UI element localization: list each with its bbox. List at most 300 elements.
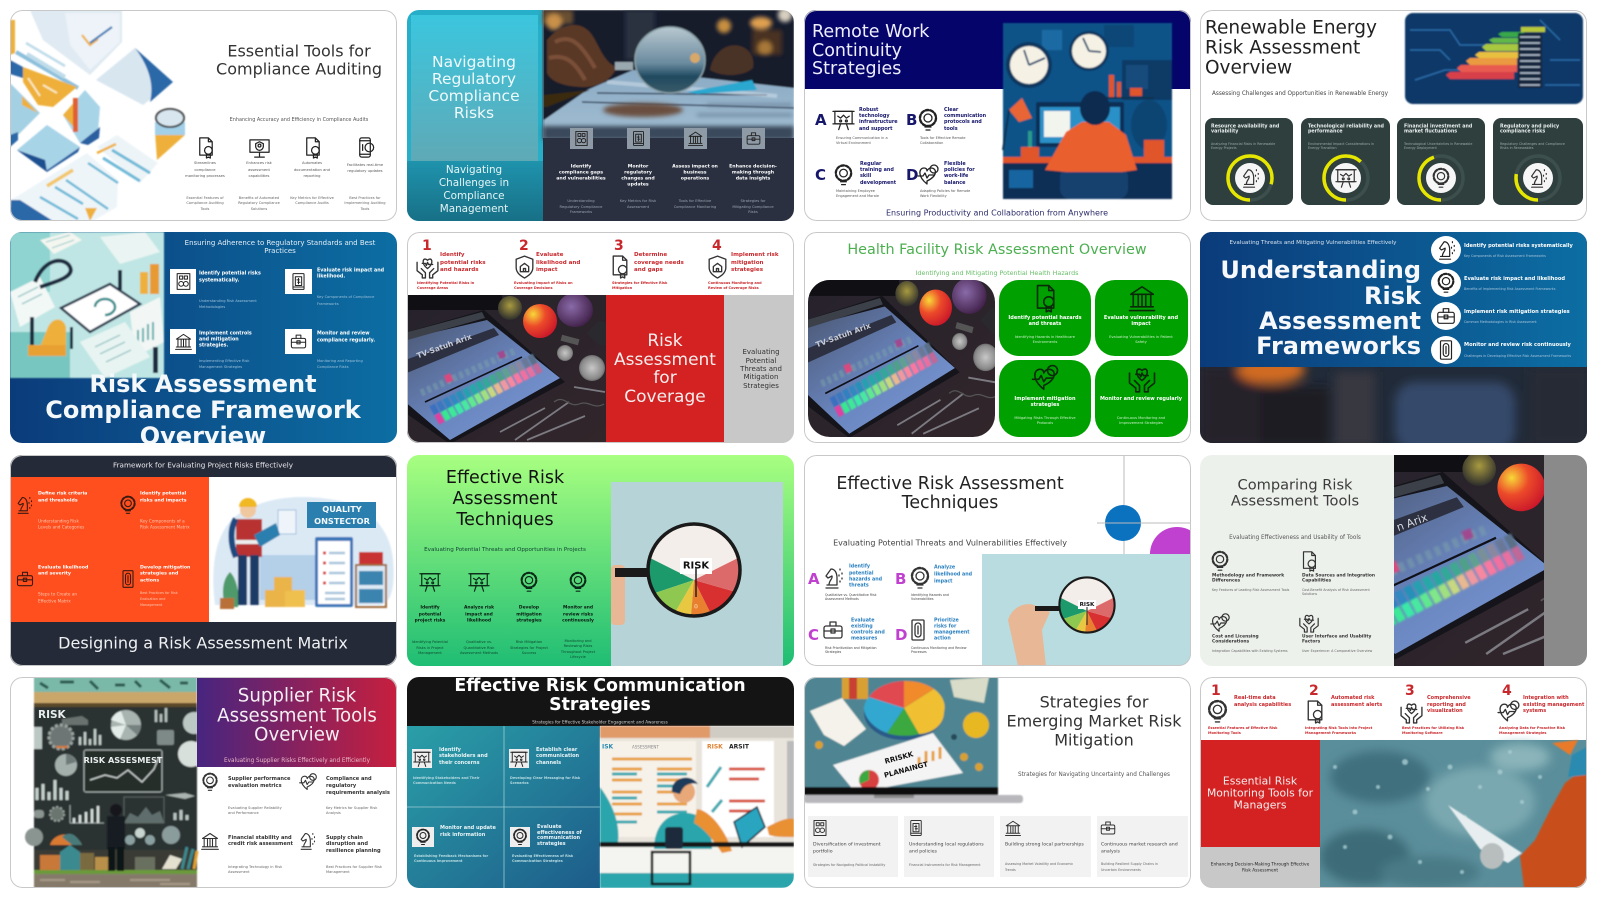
supporting captions: Reviewing Risks — [564, 644, 593, 648]
supporting captions: Frameworks — [570, 210, 592, 214]
title: Mitigation — [1054, 730, 1134, 750]
card: resource availability — [1205, 118, 1293, 205]
feature captions: capabilities — [249, 174, 270, 178]
item A: A — [815, 111, 827, 129]
supporting captions: Tools — [360, 207, 370, 211]
item: cost: Cost and Licensing — [1212, 634, 1259, 640]
subtitle block: Potential — [746, 357, 776, 365]
item: monitor compliance: Monitoring and Reporting — [317, 359, 363, 363]
title — [454, 676, 746, 715]
item B: B — [906, 111, 917, 129]
step labels: strategies — [516, 618, 542, 624]
tile: implement mitigation: Implement mitigation — [1014, 396, 1076, 402]
step 2: Evaluating Impact of Risks on — [514, 281, 573, 285]
panel: Designing a Risk Assessment Matrix — [10, 455, 397, 666]
title: Remote Work — [812, 22, 930, 42]
step: monitor: Challenges in Developing Effective Risk Assessment Frameworks — [1464, 354, 1571, 358]
item D: Work Flexibility — [920, 194, 947, 198]
item: methodology: Methodology and Framework — [1212, 572, 1284, 578]
step 2: 2 — [519, 238, 529, 254]
card: resource availability: variability — [1211, 128, 1239, 134]
title — [46, 374, 362, 443]
item B — [895, 564, 973, 601]
item: data sources: Solutions — [1302, 592, 1317, 596]
item A: Assessment Methods — [825, 597, 859, 601]
item: identify risks: Risk Assessment Matrix — [140, 524, 190, 530]
step: evaluate: Evaluate risk impact and likelihood — [1464, 276, 1565, 282]
title — [812, 22, 930, 79]
item A — [808, 564, 883, 601]
card: technological reliability — [1301, 118, 1390, 205]
item C: C — [808, 626, 819, 644]
item C: development — [860, 180, 897, 186]
title: Understanding — [1220, 256, 1421, 284]
action labels — [556, 164, 777, 188]
card: local partnerships — [1000, 816, 1091, 877]
step 3: and gaps — [634, 267, 663, 273]
item D: management — [934, 630, 970, 636]
step 2: Evaluate — [536, 252, 564, 258]
item C: existing — [851, 624, 873, 630]
feature captions: monitoring processes — [185, 174, 225, 178]
item: compliance: regulatory — [326, 783, 357, 789]
item B: Vulnerabilities — [911, 597, 934, 601]
item B: protocols and — [944, 119, 982, 125]
item: channels: communication — [536, 753, 580, 759]
card: resource availability: Resource availability and — [1211, 124, 1280, 130]
item A: technology — [859, 113, 890, 119]
step labels: impact and — [465, 612, 493, 618]
item: data sources: Data Sources and Integration — [1302, 572, 1375, 578]
step: implement: Common Methodologies in Risk Assessment — [1464, 320, 1537, 324]
item: compliance: Analysis — [326, 811, 341, 815]
item B: communication — [944, 113, 987, 119]
item D — [895, 618, 970, 654]
tile: identify hazards: Identifying Hazards in Healthcare — [1015, 335, 1076, 339]
supporting captions: Strategies for — [740, 199, 766, 203]
illustration: quality inspector: ONSTECTOR — [314, 516, 371, 526]
item: supply chain: resilience planning — [326, 848, 381, 854]
item A: Robust — [859, 107, 879, 113]
title: Health Facility Risk Assessment Overview — [847, 242, 1147, 258]
subtitle: Challenges in — [439, 177, 509, 189]
feature captions: Facilitates real-time — [347, 163, 384, 167]
card: market research: Continuous market research and — [1101, 842, 1178, 848]
subtitle — [439, 164, 509, 215]
item: implement controls: strategies. — [199, 342, 228, 348]
title — [216, 44, 381, 78]
decorative shapes — [1097, 455, 1204, 581]
step: identify: Identify potential risks systematically — [1464, 243, 1574, 249]
title block: for — [653, 368, 677, 388]
step labels: continuously — [562, 618, 594, 624]
item: define criteria: Understanding Risk — [38, 518, 79, 524]
title: Renewable Energy — [1205, 18, 1377, 38]
header subtitle: Framework for Evaluating Project Risks Effectively — [113, 460, 294, 470]
title: Techniques — [455, 510, 554, 530]
item C: skill — [860, 173, 872, 179]
image: energy rating bars — [1405, 13, 1583, 104]
card: regulatory and policy: Regulatory Challenges and Compliance — [1500, 142, 1565, 146]
feature captions: reporting — [304, 174, 320, 178]
supporting captions: Regulatory Compliance — [560, 205, 603, 209]
item A: Qualitative vs. Quantitative Risk — [825, 593, 877, 597]
photo: analytics tablet close-up: n Arix — [1395, 511, 1430, 534]
item: evaluate: strategies — [537, 841, 566, 847]
step 2: 2 — [1309, 683, 1319, 699]
panel: Renewable Energy Risk Assessment Overview — [1200, 10, 1587, 221]
illustration: abstract documents collage — [10, 10, 185, 221]
item A: Identify — [849, 564, 871, 570]
item C: Evaluate — [851, 618, 875, 624]
item D — [906, 161, 975, 198]
action labels: Monitor — [628, 164, 649, 170]
step 3: 3 — [614, 238, 624, 254]
item C: Regular — [860, 161, 882, 167]
step 3: Determine — [634, 252, 667, 258]
item: channels: Developing Clear Messaging for Risk — [510, 776, 581, 780]
item: implement controls — [170, 329, 252, 369]
card: local regulations: Financial Instruments for Risk Management — [909, 863, 981, 867]
step 1: potential risks — [440, 260, 486, 266]
title — [1206, 19, 1376, 74]
icon row — [570, 128, 765, 149]
photo: worker reading paper in rain — [1320, 740, 1587, 888]
tile: implement mitigation: Protocols — [1037, 421, 1053, 425]
supporting captions: Mitigating Compliance — [732, 205, 774, 209]
title band: Evaluating Supplier Risks Effectively and Efficiently — [224, 758, 371, 764]
item C: C — [815, 166, 826, 184]
item: compliance — [300, 774, 390, 815]
step 1 — [417, 238, 486, 290]
item C: measures — [851, 636, 877, 642]
item C: training and — [860, 167, 894, 173]
tile: evaluate vulnerability: Evaluate vulnerability and — [1104, 315, 1178, 321]
photo: analytics tablet on desk — [798, 269, 1019, 460]
panel: Effective Risk Assessment Techniques (white) — [804, 455, 1204, 666]
step 3 — [1401, 683, 1471, 735]
step 2: assessment alerts — [1331, 702, 1382, 708]
supporting captions: Risk Mitigation — [516, 640, 542, 644]
title: Assessment Tools — [1231, 492, 1359, 510]
step 4: 4 — [1502, 683, 1512, 699]
panel: Comparing Risk Assessment Tools — [1200, 437, 1600, 689]
step 2: Integrating Risk Tools into Project — [1305, 726, 1373, 730]
step 3: coverage needs — [634, 260, 684, 266]
action labels: and vulnerabilities — [556, 176, 606, 182]
step labels: Identify — [420, 604, 440, 610]
item: develop mitigation: Evaluation and — [140, 597, 165, 601]
item: evaluate likelihood: Steps to Create an — [38, 592, 77, 596]
title: Strategies — [812, 59, 901, 79]
panel: Effective Risk Communication Strategies — [407, 676, 794, 888]
step 2: Management Frameworks — [1305, 731, 1356, 735]
item: evaluate: Evaluate — [537, 824, 562, 830]
tile: identify hazards: Identify potential hazards — [1008, 315, 1082, 321]
item: performance — [203, 774, 291, 815]
item: compliance: Compliance and — [326, 776, 372, 782]
tile: identify hazards: and threats — [1029, 321, 1061, 327]
item: evaluate: communication — [537, 835, 581, 841]
photo: blurred desk background — [1200, 232, 1590, 452]
card: financial investment: Technological Uncertainties in Renewable — [1403, 142, 1472, 146]
step labels: review risks — [563, 612, 593, 618]
step 2: likelihood and — [536, 260, 580, 266]
card: financial investment: Energy Deployment — [1404, 146, 1437, 150]
item: implement controls: Implementing Effective Risk — [199, 359, 250, 363]
subtitle block: Risk Assessment — [1242, 868, 1278, 874]
title: Compliance — [428, 87, 520, 105]
item: identify risks: Key Components of a — [140, 518, 185, 524]
action labels: making through — [732, 170, 774, 176]
item A: potential — [849, 570, 874, 576]
subtitle: Evaluating Potential Threats and Opportunities in Projects — [424, 547, 586, 553]
subtitle block: Mitigation — [744, 373, 778, 381]
supporting captions: Success — [522, 651, 536, 655]
panel: Essential Risk Monitoring Tools for Managers — [1200, 677, 1587, 888]
item: stakeholders: Identify — [439, 747, 462, 753]
image: laptop with risk planning desk — [804, 677, 1023, 803]
step labels: project risks — [415, 618, 446, 624]
subtitle: Management — [440, 203, 508, 215]
item A: infrastructure — [859, 119, 898, 125]
supporting captions: Understanding — [567, 199, 595, 203]
card: diversification: Strategies for Navigating Political Instability — [813, 863, 885, 867]
card: market research: Building Resilient Supply Chains in — [1101, 862, 1158, 866]
item B: Analyze — [934, 564, 956, 570]
title: Strategies for — [1040, 692, 1149, 712]
illustration: team reviewing risk charts: ISK — [602, 744, 614, 750]
subtitle block — [724, 295, 794, 443]
item: channels — [509, 747, 581, 785]
step 4: 4 — [712, 238, 722, 254]
step 3: Comprehensive — [1427, 695, 1471, 701]
card: market research: Uncertain Environments — [1101, 868, 1141, 872]
step: identify — [1431, 236, 1574, 264]
supporting captions: Tools — [200, 207, 210, 211]
item C — [808, 618, 885, 654]
tile: evaluate vulnerability — [1095, 280, 1188, 356]
item: monitor compliance — [285, 329, 375, 369]
item B: Collaboration — [920, 141, 943, 145]
step 4: Integration with — [1523, 695, 1569, 701]
item: stakeholders — [412, 747, 488, 785]
item: define criteria: Levels and Categories — [38, 524, 84, 530]
step 1: Monitoring Tools — [1208, 731, 1241, 735]
card: financial investment: market fluctuations — [1404, 128, 1457, 134]
item: channels: channels — [536, 760, 561, 766]
supporting captions — [412, 639, 596, 659]
supporting captions: Monitoring and — [564, 639, 592, 643]
item: user interface — [1300, 615, 1372, 653]
item D: policies for — [944, 167, 975, 173]
item: define criteria: and thresholds — [38, 498, 78, 504]
item: performance: Evaluating Supplier Reliability — [228, 806, 283, 810]
panel: Strategies for Emerging Market Risk Mitigation — [804, 677, 1191, 888]
step 4: Review of Coverage Risks — [708, 286, 759, 290]
item: monitor: Establishing Feedback Mechanisms for — [414, 854, 488, 858]
title: Risks — [454, 104, 494, 122]
title — [1220, 256, 1422, 360]
item A: Ensuring Communication in a — [836, 136, 888, 140]
item: channels: Scenarios — [510, 781, 529, 785]
item: financial: Integrating Technology in Risk — [228, 865, 283, 869]
item: monitor — [412, 825, 496, 863]
item: data sources: Capabilities — [1302, 578, 1332, 584]
card: technological reliability: Environmental Impact Considerations in — [1308, 142, 1374, 146]
item C: Risk Prioritization and Mitigation — [825, 646, 877, 650]
image: risk magnifier — [611, 482, 783, 666]
item: identify risks: risks and impacts — [140, 498, 187, 504]
card: technological reliability: performance — [1308, 128, 1343, 134]
card: financial investment: Financial investment and — [1404, 124, 1473, 130]
item: stakeholders: Communication Needs — [413, 781, 456, 785]
title: Risk Assessment — [1205, 38, 1360, 58]
subtitle: Enhancing Accuracy and Efficiency in Compliance Audits — [230, 117, 369, 123]
step: evaluate: Benefits of Implementing Risk Assessment Frameworks — [1464, 287, 1556, 291]
panel: Understanding Risk Assessment Frameworks — [1200, 232, 1590, 452]
step labels: likelihood — [467, 618, 491, 624]
item D: Adapting Policies for Remote — [920, 189, 970, 193]
item C: Maintaining Employee — [836, 189, 875, 193]
step 4 — [708, 238, 779, 290]
item D: risks for — [934, 624, 957, 630]
action labels: operations — [681, 176, 709, 182]
subtitle block: Threats and — [739, 365, 782, 373]
feature captions: assessment — [248, 168, 270, 172]
image: hand holding risk magnifier: RISK — [1080, 602, 1095, 608]
step 1: Essential Features of Effective Risk — [1208, 726, 1278, 730]
panel: Health Facility Risk Assessment Overview — [798, 232, 1191, 460]
image: risk chalkboard: RISK ASSESMEST — [84, 755, 163, 765]
supporting captions — [560, 200, 774, 213]
item B — [906, 107, 987, 145]
item B: impact — [934, 578, 953, 584]
card: regulatory and policy: compliance risks — [1500, 128, 1545, 134]
image: risk chalkboard: RISK — [38, 709, 67, 721]
step 1 — [1208, 683, 1291, 735]
title: Essential Tools for — [227, 42, 371, 60]
item: user interface: User Interface and Usability — [1302, 634, 1371, 640]
item: develop mitigation: Develop mitigation — [140, 564, 190, 570]
item: user interface: Factors — [1302, 638, 1321, 644]
action labels: changes and — [621, 176, 655, 182]
feature captions: documentation and — [294, 168, 330, 172]
title: Risk — [1364, 282, 1422, 310]
title: Effective Risk — [446, 468, 565, 488]
subtitle: Navigating — [446, 164, 502, 176]
title: Effective Risk Communication — [454, 676, 746, 696]
title: Comparing Risk — [1238, 476, 1353, 494]
item: supply chain: Supply chain — [326, 835, 363, 841]
step 4: Analyzing Data for Proactive Risk — [1499, 726, 1566, 730]
feature captions: compliance — [194, 168, 216, 172]
supporting captions: Compliance Monitoring — [674, 205, 716, 209]
item: identify risks: Identify potential — [140, 490, 187, 496]
item A: threats — [849, 582, 869, 588]
card: local regulations: and policies — [909, 848, 938, 854]
panel: Risk Assessment for Coverage — [407, 232, 794, 443]
item: evaluate likelihood — [18, 564, 88, 604]
tile: identify hazards — [999, 280, 1091, 356]
item: compliance: requirements analysis — [326, 790, 390, 796]
heading: Ensuring Adherence to Regulatory Standards and Best — [185, 239, 376, 247]
title — [446, 468, 565, 530]
step labels: Analyze risk — [464, 604, 494, 610]
image: risk chalkboard — [25, 677, 205, 888]
tile: implement mitigation — [999, 360, 1091, 437]
item: stakeholders: Identifying Stakeholders and Their — [413, 776, 480, 780]
item: methodology: Differences — [1212, 578, 1241, 584]
supporting captions: Key Metrics for Risk — [620, 199, 657, 203]
item: monitor compliance: Compliance Risks — [317, 365, 349, 369]
subtitle: Evaluating Threats and Mitigating Vulnerabilities Effectively — [1230, 240, 1397, 246]
item: cost: Integration Capabilities with Existing Systems — [1212, 649, 1288, 653]
item: evaluate impact: Key Components of Compliance — [317, 295, 375, 299]
step 4: Management Strategies — [1499, 731, 1546, 735]
step 4: Continuous Monitoring and — [708, 281, 762, 285]
item: identify risks — [170, 269, 261, 309]
image: laptop with risk planning desk: PLANAINGT — [883, 760, 929, 780]
item B: Clear — [944, 107, 959, 113]
item: evaluate: effectiveness of — [537, 830, 583, 836]
item A: A — [808, 570, 820, 588]
item: evaluate: Evaluating Effectiveness of Risk — [512, 854, 574, 858]
item: methodology: Key Features of Leading Risk Assessment Tools — [1212, 588, 1290, 592]
item: supply chain: disruption and — [326, 841, 368, 847]
step 1: 1 — [1211, 683, 1221, 699]
title: Strategies — [549, 695, 651, 715]
title: Designing a Risk Assessment Matrix — [58, 634, 348, 652]
item: performance: Supplier performance — [228, 776, 291, 782]
title: Assessment — [453, 489, 558, 509]
title: Regulatory — [432, 70, 516, 88]
step labels: potential — [419, 612, 442, 618]
supporting captions: Compliance Auditing — [186, 201, 224, 205]
title — [836, 474, 1064, 513]
item D: D — [906, 166, 918, 184]
item: financial — [202, 834, 293, 874]
item: supply chain — [301, 834, 383, 874]
step 1: Identify — [440, 252, 465, 258]
title band: Overview — [254, 724, 340, 746]
supporting captions: Assessment Methods — [460, 651, 498, 655]
item: monitor: Continuous Improvement — [414, 859, 463, 863]
step 4: strategies — [731, 267, 764, 273]
item: develop mitigation: Management — [140, 603, 163, 607]
item A: and support — [859, 126, 893, 132]
item D: Flexible — [944, 161, 966, 167]
card: resource availability: Energy Projects — [1211, 146, 1237, 150]
supporting captions: Compliance Audits — [295, 201, 329, 205]
item B: B — [895, 570, 906, 588]
supporting captions: Identifying Potential — [412, 640, 448, 644]
title block: Monitoring Tools for — [1207, 786, 1314, 800]
title band: Supplier Risk — [238, 686, 357, 706]
title block: Essential Risk — [1223, 774, 1298, 788]
item: evaluate impact: Evaluate risk impact and — [317, 268, 385, 274]
item C — [815, 161, 897, 198]
item D: Continuous Monitoring and Review — [911, 646, 967, 650]
tile: implement mitigation: strategies — [1031, 402, 1059, 408]
title block: Risk — [647, 331, 683, 351]
tile: identify hazards: Environments — [1033, 340, 1058, 344]
subtitle: Identifying and Mitigating Potential Health Hazards — [916, 269, 1079, 277]
panel: Supplier Risk Assessment Tools Overview — [10, 677, 397, 888]
tile: implement mitigation: Mitigating Risks Through Effective — [1014, 416, 1076, 420]
card: local regulations: Understanding local regulations — [909, 842, 984, 848]
step 3: reporting and — [1427, 702, 1466, 708]
